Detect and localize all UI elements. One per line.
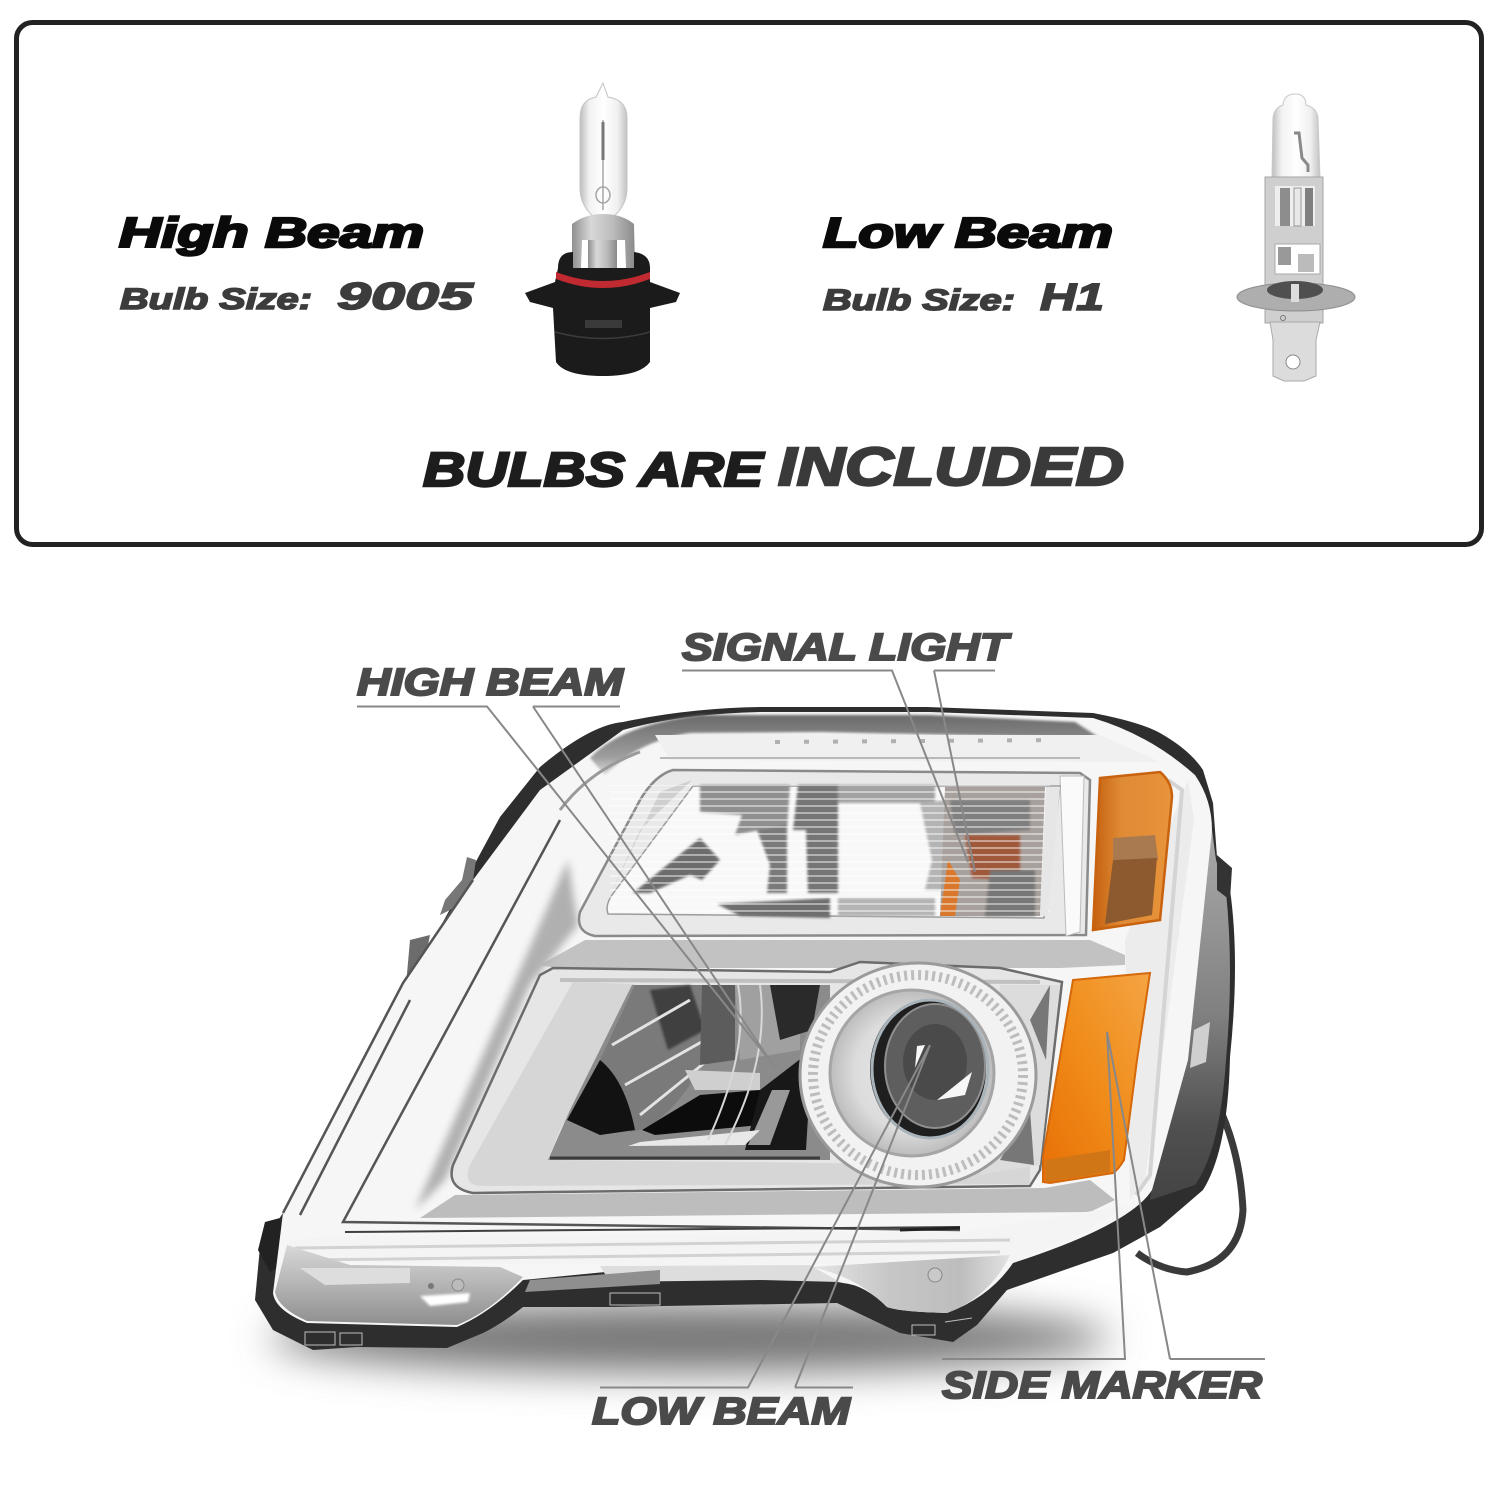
ground shadow xyxy=(270,1304,1110,1372)
upper reflector frame xyxy=(579,770,1090,936)
text: high beam bulb size: Bulb Size: xyxy=(120,283,312,316)
lower lens bands xyxy=(288,1205,1130,1265)
text: high beam bulb size xyxy=(120,276,474,318)
text: high beam bulb size: 9005 xyxy=(337,276,474,318)
signal bulb reflection xyxy=(940,787,1045,916)
lower light panel xyxy=(468,982,1030,1186)
mounting tabs xyxy=(258,855,1232,1272)
text: low beam bulb size: H1 xyxy=(1040,277,1104,319)
callout: side marker: SIDE MARKER xyxy=(942,1365,1263,1407)
heading: bulbs are included xyxy=(423,437,1124,497)
bezel grey bands xyxy=(415,780,1194,1218)
upper inner lens xyxy=(607,780,1060,918)
rear housing xyxy=(255,707,1235,1350)
heading: high beam: High Beam xyxy=(119,209,424,256)
upper side marker xyxy=(1093,772,1172,930)
icon: H1 bulb xyxy=(1237,94,1355,381)
mounting screw plate xyxy=(1190,1022,1210,1068)
bottom clips xyxy=(305,1293,972,1345)
callout: high beam: HIGH BEAM xyxy=(357,662,625,704)
lower lip right xyxy=(525,1255,1010,1313)
icon: 9005 bulb xyxy=(525,83,680,376)
callout: high beam xyxy=(357,662,775,1068)
upper lens reflection bands xyxy=(633,785,947,918)
lower lip left xyxy=(275,1245,523,1325)
callout: side marker xyxy=(942,1032,1265,1407)
panel: bulbs included xyxy=(16,22,1482,544)
illustration: headlight assembly xyxy=(255,707,1243,1372)
lower side marker xyxy=(1043,973,1150,1183)
side panel xyxy=(1150,830,1230,1200)
callout: low beam: LOW BEAM xyxy=(592,1391,852,1433)
outer lens xyxy=(273,712,1212,1327)
callout: signal light: SIGNAL LIGHT xyxy=(682,627,1011,669)
wire xyxy=(1137,1103,1243,1272)
heading: bulbs are included: BULBS ARE xyxy=(423,444,765,497)
heading: low beam: Low Beam xyxy=(823,209,1113,256)
left dark lines xyxy=(283,820,960,1230)
lower reflector frame xyxy=(452,962,1062,1193)
low-beam reflector xyxy=(548,985,830,1160)
text: low beam bulb size: Bulb Size: xyxy=(823,284,1015,317)
white studded rim xyxy=(655,735,1160,762)
top dark strip xyxy=(590,715,1100,775)
heading: bulbs are included: INCLUDED xyxy=(778,437,1124,497)
text: low beam bulb size xyxy=(823,277,1104,319)
projector xyxy=(800,963,1060,1187)
callout: signal light xyxy=(682,627,1011,872)
callout: low beam xyxy=(592,1045,930,1433)
